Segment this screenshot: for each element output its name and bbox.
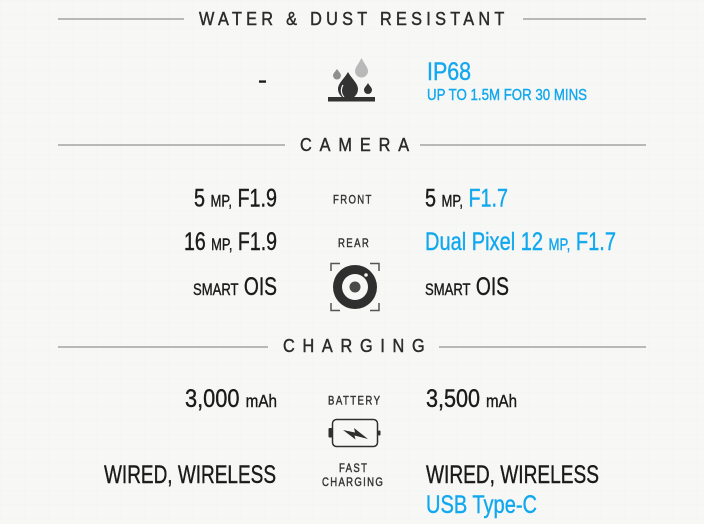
text: new model water rating: UP TO 1.5M FOR 30 MINS [427,87,587,104]
label: fast charging [322,462,383,489]
text: new model water rating: IP68 [427,58,471,86]
text: rear camera old: 16 MP, F1.9 [184,228,277,256]
icon: battery [328,420,380,446]
text: charging new: USB Type-C [426,491,537,519]
label: battery: BATTERY [328,395,380,408]
text: charging old: WIRED, WIRELESS [104,461,276,489]
text: new model water rating [427,58,587,104]
heading: charging: CHARGING [283,335,425,356]
text: battery old: 3,000 mAh [185,385,277,413]
text: battery new: 3,500 mAh [426,385,517,413]
text: charging new: WIRED, WIRELESS [426,461,599,489]
text: stabilisation old: SMART OIS [193,273,277,301]
heading: water and dust resistant: WATER & DUST RESISTANT [199,8,505,29]
text: front camera old: 5 MP, F1.9 [194,184,277,212]
text: charging new [426,461,599,519]
label: front: FRONT [333,194,372,207]
icon: camera [331,264,379,310]
heading: camera: CAMERA [300,134,409,155]
label: fast charging: CHARGING [322,476,383,489]
text: previous model water rating dash: - [258,67,267,94]
text: front camera new: 5 MP, F1.7 [425,184,508,212]
text: stabilisation new: SMART OIS [425,273,509,301]
label: rear: REAR [338,237,369,250]
label: fast charging: FAST [339,462,367,475]
text: rear camera new: Dual Pixel 12 MP, F1.7 [425,228,616,256]
icon: water drops [328,58,375,102]
